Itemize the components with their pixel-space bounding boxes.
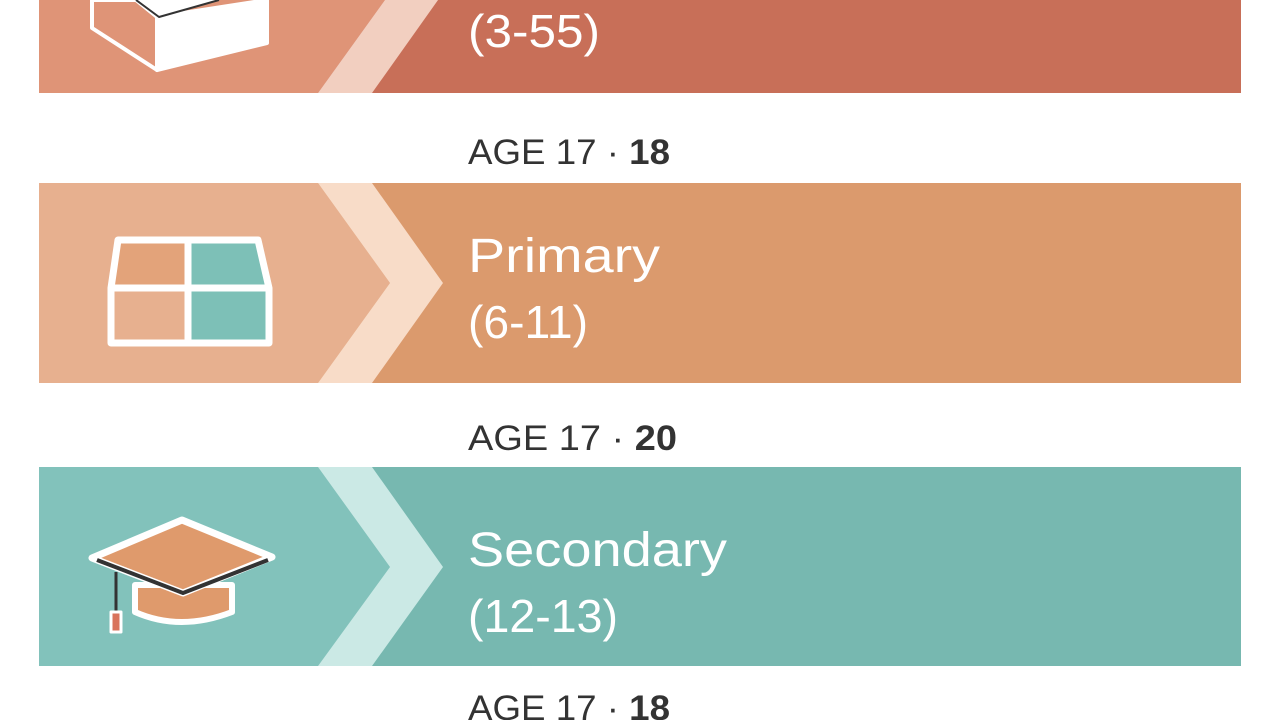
band: secondary: (12-13) — [468, 590, 618, 642]
text: secondary: Secondary — [468, 524, 727, 577]
age label 1: AGE 17 · 18 — [468, 133, 670, 172]
icon: box grid — [111, 240, 269, 343]
age label 2: AGE 17 · 20 — [468, 419, 677, 458]
icon: graduation cap — [92, 520, 272, 632]
band: primary: (6-11) — [468, 296, 588, 348]
band: top (cut off) — [39, 0, 1241, 93]
icon: book box — [92, 0, 267, 70]
band: primary — [39, 183, 1241, 383]
text: primary: Primary — [468, 230, 660, 283]
text: top range: (3-55) — [468, 5, 600, 57]
band: secondary — [39, 467, 1241, 666]
